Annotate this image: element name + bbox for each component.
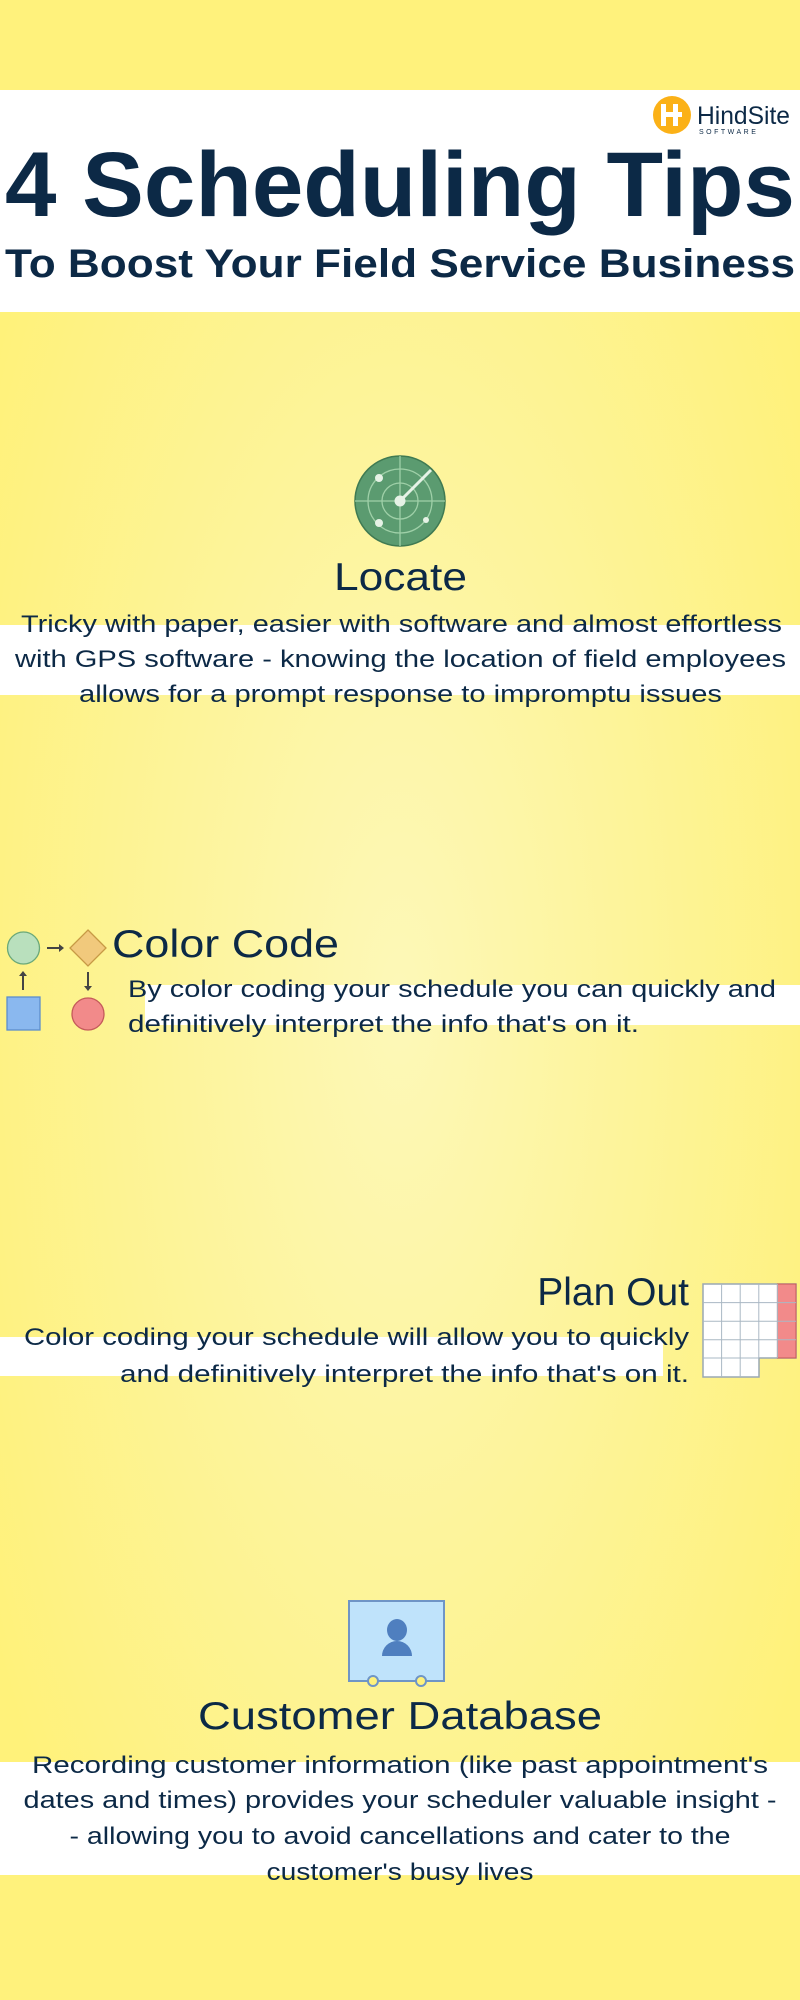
panel: locate bbox=[0, 456, 800, 708]
text: customer database body bbox=[24, 1752, 776, 1886]
panel: plan out bbox=[0, 1271, 796, 1388]
text: locate body bbox=[14, 611, 786, 708]
text: locate body: with GPS software - knowing the location of field employees bbox=[14, 646, 786, 673]
heading: Customer Database: Customer Database bbox=[198, 1695, 602, 1738]
text: color code body: By color coding your schedule you can quickly and bbox=[128, 976, 776, 1003]
heading: Plan Out: Plan Out bbox=[537, 1271, 689, 1314]
logo: HindSite bbox=[697, 102, 790, 130]
text: locate body: allows for a prompt response to impromptu issues bbox=[79, 681, 722, 708]
icon: calendar grid bbox=[703, 1284, 796, 1377]
icon: radar bbox=[355, 456, 445, 546]
title: 4 Scheduling Tips bbox=[5, 134, 795, 236]
text: locate body: Tricky with paper, easier with software and almost effortless bbox=[21, 611, 782, 638]
subtitle: To Boost Your Field Service Business bbox=[5, 242, 795, 286]
logo bbox=[653, 96, 790, 136]
heading: Locate: Locate bbox=[334, 556, 467, 599]
text: plan out body: and definitively interpret the info that's on it. bbox=[120, 1361, 689, 1388]
text: customer database body: dates and times) provides your scheduler valuable insight - bbox=[24, 1787, 776, 1814]
panel: color code bbox=[7, 923, 800, 1038]
text: color code body bbox=[128, 976, 776, 1038]
header band bbox=[0, 90, 800, 312]
text: customer database body: customer's busy lives bbox=[266, 1859, 534, 1886]
icon: contact card bbox=[349, 1601, 444, 1686]
text: plan out body bbox=[24, 1324, 689, 1388]
text: plan out body: Color coding your schedule will allow you to quickly bbox=[24, 1324, 689, 1351]
icon: flowchart bbox=[7, 930, 106, 1030]
text: customer database body: Recording customer information (like past appointment's bbox=[32, 1752, 768, 1779]
heading: Color Code: Color Code bbox=[112, 923, 339, 966]
text: color code body: definitively interpret the info that's on it. bbox=[128, 1011, 639, 1038]
panel: customer database bbox=[0, 1601, 800, 1886]
logo: SOFTWARE bbox=[699, 129, 758, 136]
text: customer database body: - allowing you to avoid cancellations and cater to the bbox=[70, 1823, 730, 1850]
